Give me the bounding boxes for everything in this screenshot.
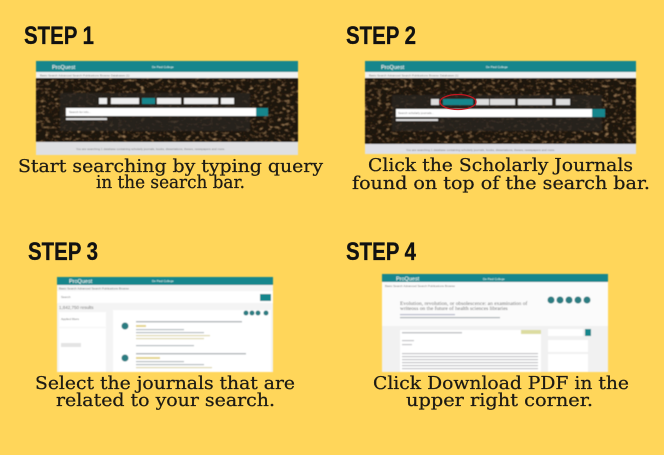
screenshot: ProQuest basic search: Basic Search Advanced Search Publications Browse Databases (1)	[40, 74, 130, 78]
screenshot: article page with Download PDF: Evolution, revolution, or obsolescence: an examination of	[400, 300, 528, 307]
highlight: red ellipse around Scholarly Journals	[440, 94, 476, 110]
screenshot: article page with Download PDF: writeoss on the future of health sciences libraries	[400, 305, 508, 312]
screenshot: Scholarly Journals tab highlighted: ProQuest	[381, 65, 405, 71]
caption: step 2: found on top of the search bar.	[352, 173, 650, 194]
screenshot: search results list: Basic Search Advanced Search Publications Browse	[59, 286, 129, 290]
screenshot: ProQuest basic search: Search for info...	[69, 110, 91, 114]
panel: step 3	[28, 238, 295, 411]
screenshot: Scholarly Journals tab highlighted: De Paul College	[486, 65, 508, 69]
screenshot: Scholarly Journals tab highlighted: You are searching 1 database containing scholarly journals, books, dissertations, theses, newspapers and more.	[406, 148, 555, 152]
caption: step 1	[18, 156, 324, 193]
screenshot: search results list	[57, 277, 273, 372]
caption: step 2	[352, 155, 650, 194]
screenshot: search results list: 1,842,750 results	[59, 305, 94, 310]
caption: step 3: Select the journals that are	[35, 373, 295, 394]
screenshot: search results list: ProQuest	[69, 279, 93, 285]
screenshot: ProQuest basic search: ProQuest	[52, 65, 76, 71]
screenshot: Scholarly Journals tab highlighted: Search scholarly journals...	[398, 111, 434, 115]
heading: step 1: STEP 1	[24, 22, 94, 50]
caption: step 4: Click Download PDF in the	[373, 373, 629, 394]
caption: step 4: upper right corner.	[406, 390, 593, 411]
screenshot: Scholarly Journals tab highlighted	[365, 61, 636, 154]
screenshot: article page with Download PDF: De Paul College	[483, 277, 505, 281]
screenshot: ProQuest basic search: You are searching 1 database containing scholarly journals, books, dissertations, theses, newspapers and more.	[76, 147, 225, 151]
caption: step 1: Start searching by typing query	[18, 156, 324, 177]
heading: step 3: STEP 3	[28, 238, 98, 266]
screenshot: search results list: Applied filters	[61, 317, 80, 321]
caption: step 1: in the search bar.	[96, 172, 245, 193]
screenshot: article page with Download PDF: Basic Search Advanced Search Publications Browse	[385, 284, 455, 288]
screenshot: search results list: Search	[61, 295, 71, 299]
heading: step 4: STEP 4	[346, 238, 416, 266]
screenshot: article page with Download PDF: ProQuest	[396, 276, 420, 282]
screenshot: Scholarly Journals tab highlighted: Basic Search Advanced Search Publications Browse Databases (1)	[369, 74, 459, 78]
caption: step 3: related to your search.	[56, 390, 275, 411]
screenshot: ProQuest basic search	[36, 61, 298, 155]
screenshot: search results list: De Paul College	[152, 279, 174, 283]
screenshot: ProQuest basic search: De Paul College	[152, 65, 174, 69]
caption: step 4	[373, 373, 629, 411]
panel: step 2	[346, 22, 650, 194]
caption: step 2: Click the Scholarly Journals	[368, 155, 633, 176]
screenshot: article page with Download PDF	[382, 274, 608, 372]
caption: step 3	[35, 373, 295, 411]
panel: step 4	[346, 238, 629, 411]
panel: step 1	[18, 22, 324, 193]
heading: step 2: STEP 2	[346, 22, 416, 50]
